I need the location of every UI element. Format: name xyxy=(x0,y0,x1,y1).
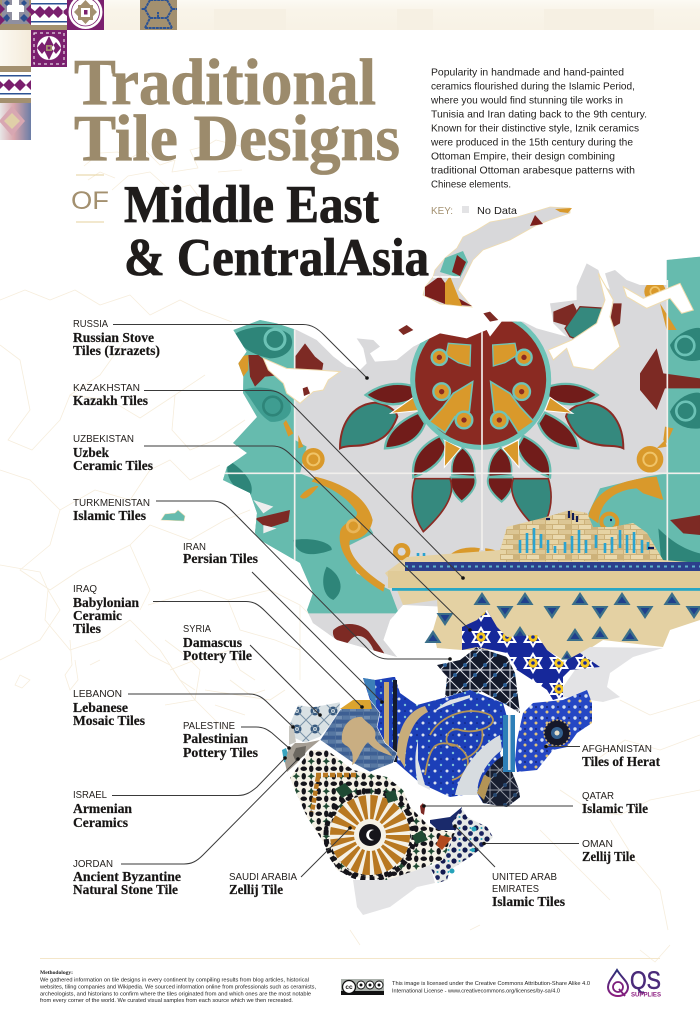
label: Iraq: Tiles xyxy=(73,621,101,636)
label: Saudi Arabia: Zellij Tile xyxy=(229,882,283,897)
intro paragraph: Ottoman Empire, their design combining xyxy=(431,152,615,162)
grey corner at upper left xyxy=(296,330,339,361)
country: Saudi Arabia xyxy=(290,750,455,880)
label: Iran: Persian Tiles xyxy=(183,551,258,566)
label: Palestine xyxy=(183,720,291,760)
leader line: Saudi Arabia xyxy=(301,826,352,877)
label: Afghanistan xyxy=(544,743,660,769)
label: Turkmenistan xyxy=(73,497,452,661)
country: no data grey region xyxy=(563,647,663,702)
small islands xyxy=(303,312,498,396)
teal panels xyxy=(200,247,700,617)
leader line: Lebanon xyxy=(128,694,295,729)
white sea inlets xyxy=(263,273,693,403)
leader line: Turkmenistan xyxy=(156,501,452,661)
label: Iran: IRAN xyxy=(183,541,206,553)
label: Uzbekistan: Ceramic Tiles xyxy=(73,458,153,473)
title line: Traditional: Traditional xyxy=(74,46,376,119)
leader line: Iraq xyxy=(153,602,364,709)
label: Palestine: Palestinian xyxy=(183,731,248,746)
creative commons badge: cc xyxy=(345,984,353,991)
tile seams xyxy=(224,280,700,560)
leader line: Russia xyxy=(113,324,369,380)
brick with blue zigzag xyxy=(418,510,663,562)
label: Russia: Russian Stove xyxy=(73,330,154,345)
country: Russia northern island xyxy=(423,207,572,307)
label: Jordan: Natural Stone Tile xyxy=(73,882,178,897)
methodology text: websites, tiling companies and Wikipedia. We sourced information online from professionals such as ceramists, xyxy=(39,984,316,990)
intro paragraph: Tunisia and Iran dating back to the 9th century. xyxy=(431,110,647,120)
title xyxy=(71,46,429,287)
country: Iraq xyxy=(320,700,397,772)
label: Jordan xyxy=(73,757,300,897)
flower disc xyxy=(413,311,549,447)
country: Israel xyxy=(282,748,289,764)
label: United Arab Emirates: UNITED ARAB xyxy=(492,871,557,883)
flower half left xyxy=(340,384,476,532)
top decorative tile band xyxy=(0,0,700,140)
label: Syria: SYRIA xyxy=(183,623,211,635)
map of countries xyxy=(161,207,700,915)
leader line: Syria xyxy=(250,645,322,717)
gold fleurs xyxy=(429,343,473,433)
label: Kazakhstan: KAZAKHSTAN xyxy=(73,382,140,394)
intro paragraph: Known for their distinctive style, Iznik ceramics xyxy=(431,124,639,134)
label: Saudi Arabia xyxy=(229,826,352,897)
dark teal scrolls xyxy=(227,327,700,600)
methodology text: archeologists, and historians to confirm where the tiles originated from and which ones are the most notable xyxy=(40,992,311,998)
title line: Tile Designs: Tile Designs xyxy=(74,102,400,175)
maroon lilies xyxy=(248,303,700,658)
methodology text: from every corner of the world. We curated visual samples from each source which we then recreated. xyxy=(40,998,293,1004)
label: Kazakhstan: Kazakh Tiles xyxy=(73,393,148,408)
logo: QS Supplies: QS xyxy=(630,967,661,995)
leader line: Kazakhstan xyxy=(144,390,465,580)
country: Iran xyxy=(363,677,520,807)
title line: Central Asia: & CentralAsia xyxy=(124,229,429,287)
country: Russia exclave xyxy=(161,510,185,521)
label: Israel: Armenian xyxy=(73,801,132,816)
country: Uzbekistan xyxy=(462,610,600,700)
leader line: Palestine xyxy=(241,727,291,750)
leader line: Afghanistan xyxy=(544,745,580,748)
label: Iraq: IRAQ xyxy=(73,583,97,595)
title word: OF: OF xyxy=(71,187,109,215)
licence text: International License - www.creativecommons.org/licenses/by-sa/4.0 xyxy=(392,988,560,994)
country: Turkmenistan xyxy=(437,647,520,713)
gold and white accents xyxy=(238,281,677,592)
label: United Arab Emirates xyxy=(453,824,565,909)
leader line: Qatar xyxy=(422,804,573,808)
label: Oman xyxy=(482,838,635,864)
methodology text: We gathered information on tile designs in every continent by compiling results from blog articles, historical xyxy=(40,978,309,984)
label: Afghanistan: Tiles of Herat xyxy=(582,754,660,769)
label: Syria: Damascus xyxy=(183,635,242,650)
intro paragraph: ceramics flourished during the Islamic Period, xyxy=(431,82,635,92)
label: Uzbekistan: Uzbek xyxy=(73,445,109,460)
methodology text xyxy=(39,970,316,1004)
country: Qatar xyxy=(420,803,425,815)
leader line: Iran xyxy=(252,572,384,704)
country: Kazakhstan xyxy=(385,510,700,660)
label: Qatar xyxy=(422,790,648,816)
label: United Arab Emirates: EMIRATES xyxy=(492,883,539,895)
tile: purple cross medallion xyxy=(31,30,67,67)
intro paragraph: Popularity in handmade and hand-painted xyxy=(431,68,624,78)
label: Uzbekistan xyxy=(73,433,472,632)
label: United Arab Emirates: Islamic Tiles xyxy=(492,894,565,909)
label: Syria xyxy=(183,623,322,717)
label: Iraq xyxy=(73,583,364,709)
leader line: United Arab Emirates xyxy=(453,824,495,867)
tile: purple with white circle xyxy=(67,0,104,30)
country: United Arab Emirates xyxy=(430,807,462,830)
leader line: Israel xyxy=(112,756,287,796)
tile: tan with purple diamonds xyxy=(0,0,31,30)
label: Kazakhstan xyxy=(73,382,465,580)
label: Russia xyxy=(73,318,369,380)
label: Qatar: QATAR xyxy=(582,790,614,802)
label: Lebanon: Mosaic Tiles xyxy=(73,713,145,728)
label: Turkmenistan: TURKMENISTAN xyxy=(73,497,150,509)
licence text: This image is licensed under the Creative Commons Attribution-Share Alike 4.0 xyxy=(392,981,590,987)
leader line: Uzbekistan xyxy=(144,446,472,632)
label: Jordan: JORDAN xyxy=(73,858,113,870)
label: Palestine: PALESTINE xyxy=(183,720,235,732)
label: Israel: ISRAEL xyxy=(73,789,107,801)
label: Iraq: Babylonian xyxy=(73,595,139,610)
tile: faded gradient diamond xyxy=(0,103,31,140)
country: Russia with large flower tile xyxy=(200,247,700,663)
creative commons badge xyxy=(341,979,384,995)
label: Israel xyxy=(73,756,287,830)
intro paragraph: Chinese elements. xyxy=(431,180,511,190)
label: Lebanon: LEBANON xyxy=(73,688,122,700)
label: Russia: RUSSIA xyxy=(73,318,108,330)
leader line: Oman xyxy=(482,842,579,845)
label: Qatar: Islamic Tile xyxy=(582,801,648,816)
logo: QS Supplies: SUPPLIES xyxy=(631,992,661,998)
footer rule xyxy=(40,958,660,960)
country: Afghanistan xyxy=(515,690,592,772)
legend key: No Data xyxy=(477,206,517,217)
tile: blue stripes with purple diamonds xyxy=(31,0,67,30)
country: Yemen no data xyxy=(353,865,435,915)
intro paragraph xyxy=(430,68,647,190)
label: Oman: Zellij Tile xyxy=(582,849,635,864)
label: Syria: Pottery Tile xyxy=(183,648,252,663)
label: Lebanon xyxy=(73,688,295,729)
tile: striped row xyxy=(0,66,31,103)
star pattern triangles xyxy=(424,592,700,660)
label: Iran xyxy=(183,541,384,704)
label: Turkmenistan: Islamic Tiles xyxy=(73,508,146,523)
upper right leaf xyxy=(564,306,602,339)
intro paragraph: were produced in the 15th century during the xyxy=(430,138,633,148)
intro paragraph: traditional Ottoman arabesque patterns with xyxy=(431,166,635,176)
legend key: KEY: xyxy=(431,206,453,217)
logo: QS Supplies xyxy=(608,967,661,998)
label: Palestine: Pottery Tiles xyxy=(183,745,258,760)
methodology text: Methodology: xyxy=(40,970,73,976)
title line: Middle East: Middle East xyxy=(124,176,379,234)
intro paragraph: where you would find stunning tile works in xyxy=(430,96,623,106)
tile: tan with blue hex lattice xyxy=(140,0,177,30)
country: Syria xyxy=(290,702,340,743)
tile: cream block xyxy=(0,30,31,66)
label: Saudi Arabia: SAUDI ARABIA xyxy=(229,871,297,883)
country: Palestine Lebanon Jordan xyxy=(285,724,320,772)
title word: OF xyxy=(71,175,109,222)
label: Iraq: Ceramic xyxy=(73,608,122,623)
label: Lebanon: Lebanese xyxy=(73,700,128,715)
label: Russia: Tiles (Izrazets) xyxy=(73,343,160,358)
label: Afghanistan: AFGHANISTAN xyxy=(582,743,652,755)
label: Uzbekistan: UZBEKISTAN xyxy=(73,433,134,445)
label: Oman: OMAN xyxy=(582,838,613,850)
leader line: Jordan xyxy=(121,757,300,864)
country: Oman xyxy=(430,808,493,883)
licence text xyxy=(392,981,590,994)
label: Israel: Ceramics xyxy=(73,815,128,830)
label: Jordan: Ancient Byzantine xyxy=(73,869,181,884)
legend key xyxy=(431,206,517,217)
